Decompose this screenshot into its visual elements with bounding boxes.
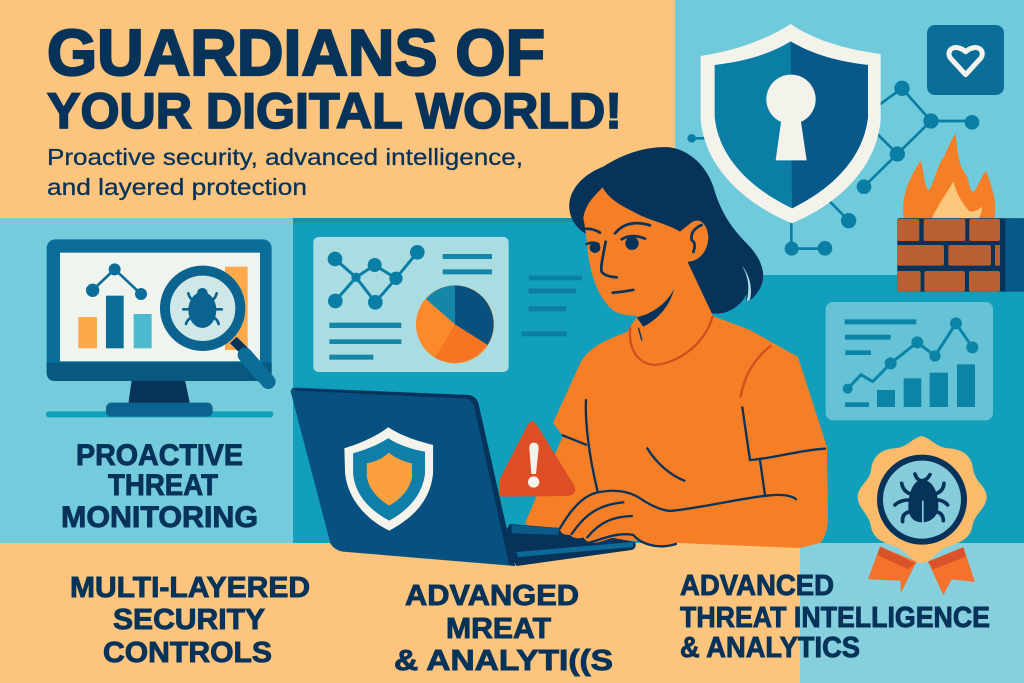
- label: proactive threat monitoring: [61, 439, 258, 534]
- label: proactive threat monitoring: THREAT: [108, 469, 218, 502]
- label: advanced threat intelligence and analytics: & ANALYTICS: [680, 632, 860, 664]
- laptop base: [500, 524, 636, 566]
- icon: bug badge with ribbon: [858, 436, 987, 595]
- label: advanced threat intelligence and analytics: [680, 570, 990, 664]
- icon: brick wall: [897, 218, 1024, 292]
- label: advanced threat intelligence and analytics: THREAT INTELLIGENCE: [680, 602, 990, 634]
- label: multi-layered security controls: MULTI-LAYERED: [70, 572, 310, 604]
- network lines: [687, 81, 979, 256]
- label: multi-layered security controls: [70, 572, 310, 669]
- panel: shield and network: [687, 24, 1024, 292]
- title: [47, 16, 622, 139]
- person: orange t-shirt and arms: [525, 300, 828, 548]
- person: hair: [569, 147, 763, 314]
- label: multi-layered security controls: CONTROLS: [103, 637, 272, 669]
- title: YOUR DIGITAL WORLD!: [47, 83, 622, 139]
- subtitle: and layered protection: [47, 174, 307, 200]
- laptop lid: [291, 388, 515, 566]
- icon: red warning triangle: [500, 421, 575, 497]
- label: proactive threat monitoring: PROACTIVE: [76, 439, 243, 472]
- label: advanged mreat and analytics: MREAT: [446, 613, 551, 645]
- label: advanged mreat and analytics: & ANALYTI((S: [394, 645, 613, 677]
- subtitle: Proactive security, advanced intelligence,: [47, 144, 523, 170]
- laptop: [291, 388, 636, 566]
- icon: firewall flame: [903, 133, 995, 220]
- panel: trend chart card: [826, 302, 993, 420]
- person: shirt details: [630, 317, 770, 397]
- icon: shield with keyhole: [701, 24, 881, 223]
- label: multi-layered security controls: SECURITY: [113, 604, 265, 636]
- title: GUARDIANS OF: [47, 16, 545, 89]
- icon: heart badge: [927, 25, 1004, 95]
- person: hand and sleeve lines: [560, 400, 825, 546]
- icon: monitor with magnifying glass: [46, 239, 273, 417]
- pie chart: [416, 285, 494, 363]
- subtitle: [47, 144, 523, 200]
- illustration: person at laptop: [291, 147, 828, 566]
- label: advanced threat intelligence and analytics: ADVANCED: [680, 570, 834, 602]
- label: advanged mreat and analytics: ADVANGED: [405, 580, 579, 612]
- person: face: [583, 187, 713, 327]
- icon: laptop shield: [344, 427, 433, 531]
- label: proactive threat monitoring: MONITORING: [61, 501, 258, 534]
- panel: proactive threat monitoring: [46, 239, 273, 534]
- label: advanged mreat and analytics: [394, 580, 613, 677]
- panel: analytics dashboard card: [313, 237, 582, 372]
